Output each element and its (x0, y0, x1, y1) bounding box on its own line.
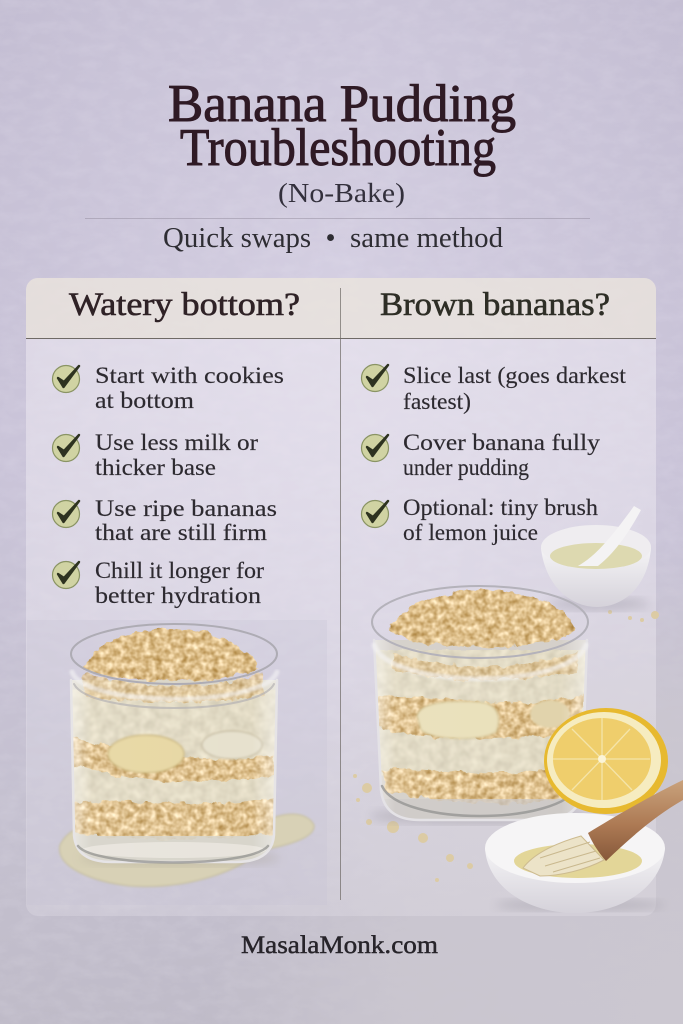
crumb topping (84, 628, 258, 681)
list: brown banana fixes (362, 363, 626, 546)
item 2: thicker base (95, 455, 216, 481)
item 1: fastest) (403, 389, 471, 415)
jar contents (372, 640, 588, 822)
subtitle: no-bake: (No-Bake) (278, 178, 405, 208)
item 1: Start with cookies (95, 363, 284, 389)
item 3: Optional: tiny brush (403, 495, 598, 521)
panel: comparison table (26, 278, 656, 916)
item 4: Chill it longer for (95, 558, 264, 584)
footer: website: MasalaMonk.com (241, 932, 439, 959)
item 1 (52, 363, 284, 414)
item 1 (362, 363, 626, 415)
jar glass (71, 624, 277, 862)
jar contents (66, 680, 282, 865)
item 3 (362, 495, 598, 546)
item 3: that are still firm (95, 520, 267, 546)
lemon half (544, 708, 668, 814)
photo surface: right side (203, 544, 683, 1024)
item 3: Use ripe bananas (95, 496, 277, 522)
front bowl (485, 813, 665, 913)
heading: watery bottom: Watery bottom? (69, 287, 300, 323)
puddle of liquid (60, 814, 314, 887)
heading: brown bananas: Brown bananas? (380, 287, 610, 323)
title: Troubleshooting (180, 119, 496, 177)
list: watery bottom fixes (52, 363, 284, 609)
item 2 (52, 430, 258, 481)
title (168, 75, 516, 177)
item 2: Cover banana fully (403, 430, 600, 456)
item 3 (52, 496, 277, 546)
left photo: watery jar (58, 623, 316, 888)
item 4 (52, 558, 264, 609)
tagline: Quick swaps • same method (163, 223, 503, 254)
pastry brush (523, 780, 683, 876)
item 2: Use less milk or (95, 430, 258, 456)
jar glass (372, 586, 588, 820)
scattered crumbs (353, 610, 659, 882)
item 3: of lemon juice (403, 520, 538, 546)
banana slice front (108, 735, 184, 773)
item 2 (362, 430, 600, 481)
jar shadow (370, 808, 590, 824)
item 1: Slice last (goes darkest (403, 363, 626, 389)
small bowl of lemon juice (541, 506, 651, 611)
crumb topping (388, 590, 574, 647)
jar shadow (80, 850, 280, 866)
title: Banana Pudding (168, 75, 516, 133)
table dividers (26, 288, 656, 900)
right photo: covered jar with lemon and brush (353, 506, 683, 913)
photo backdrop (27, 620, 327, 905)
item 2: under pudding (403, 455, 529, 481)
panel header band (26, 278, 656, 338)
item 1: at bottom (95, 388, 194, 414)
banana slices (417, 701, 499, 739)
banana slice rear (202, 731, 262, 759)
item 4: better hydration (95, 583, 261, 609)
